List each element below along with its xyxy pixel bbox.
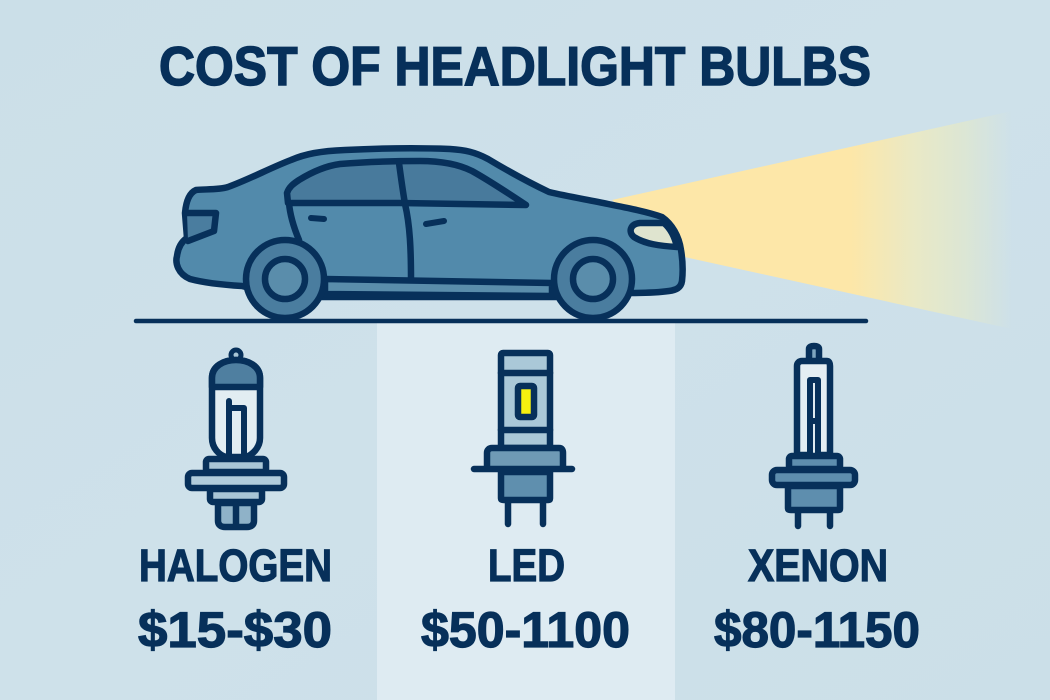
door handles — [311, 218, 444, 224]
price: LED: $50-1100 — [421, 602, 630, 658]
tail light — [187, 213, 216, 241]
icon: xenon bulb — [772, 346, 855, 526]
panel: LED column highlight — [377, 323, 675, 700]
icon: LED bulb — [474, 353, 572, 524]
price: xenon: $80-1150 — [714, 602, 920, 658]
sill — [325, 279, 552, 296]
label: xenon: XENON — [748, 540, 888, 591]
label: LED: LED — [488, 540, 565, 591]
icon: halogen bulb — [188, 350, 284, 527]
price: halogen: $15-$30 — [138, 602, 332, 658]
car body — [176, 148, 683, 297]
ground line — [136, 319, 866, 323]
rear wheel — [246, 240, 324, 318]
icon: car — [176, 148, 683, 318]
headlight beam — [612, 111, 1012, 329]
label: halogen: HALOGEN — [139, 540, 332, 591]
windows — [287, 161, 526, 205]
door pillars and seams — [289, 163, 411, 279]
headlight — [631, 223, 677, 247]
front wheel — [554, 240, 632, 318]
title: COST OF HEADLIGHT BULBS — [159, 35, 871, 97]
